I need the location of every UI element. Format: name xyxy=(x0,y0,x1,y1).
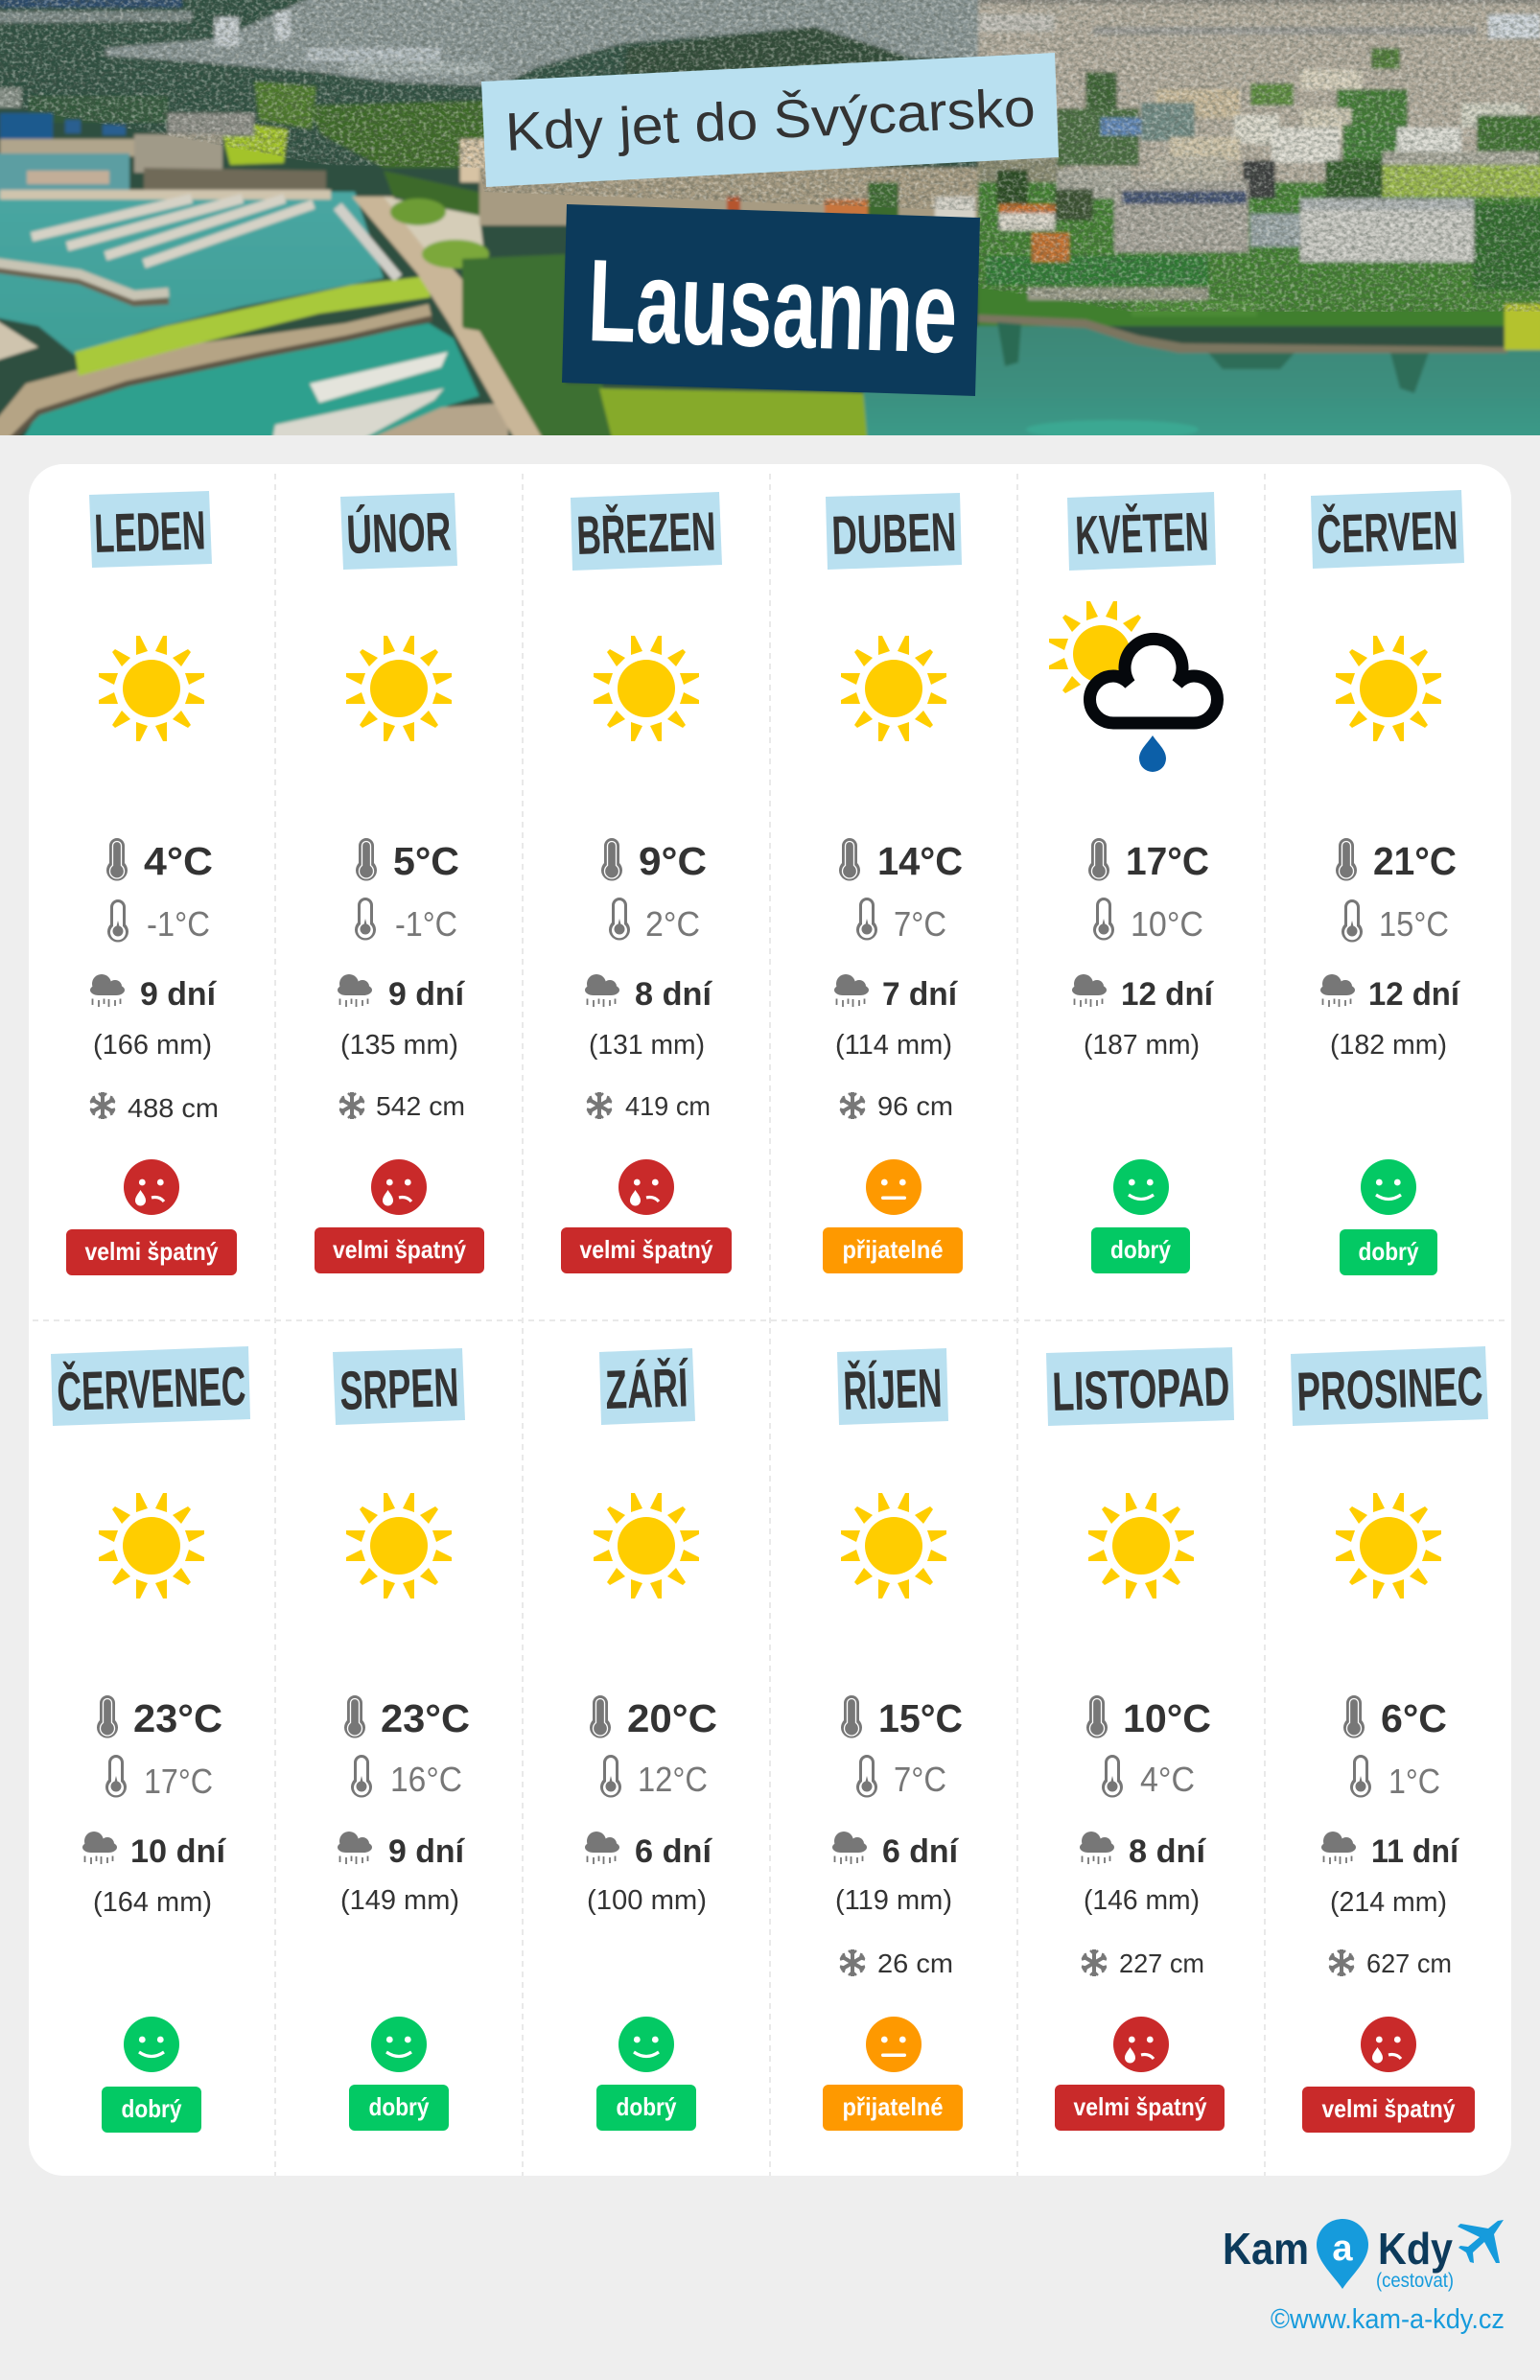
rain days xyxy=(1321,1832,1459,1870)
precipitation: (214 mm) xyxy=(1330,1887,1447,1918)
rain days: 9 dní xyxy=(140,976,218,1013)
rain days: 8 dní xyxy=(1129,1833,1207,1870)
photo: aerial view of Lausanne waterfront xyxy=(0,0,1540,451)
pin letter: a xyxy=(1332,2228,1353,2269)
rating badge: dobrý xyxy=(121,2094,182,2123)
high temperature: 20°C xyxy=(627,1696,717,1740)
rating badge: velmi špatný xyxy=(1321,2094,1456,2123)
snow: 96 cm xyxy=(877,1091,953,1121)
low temperature: -1°C xyxy=(147,904,210,944)
low temperature xyxy=(107,899,210,944)
icon: sun xyxy=(1336,636,1441,741)
rain days xyxy=(1320,974,1461,1013)
precipitation: (114 mm) xyxy=(835,1030,952,1061)
high temperature xyxy=(1086,1695,1211,1740)
heading xyxy=(333,1348,465,1425)
snow: 26 cm xyxy=(877,1948,953,1978)
icon: sun xyxy=(1336,1493,1441,1598)
low temperature: 1°C xyxy=(1388,1762,1440,1801)
decorative base layers follow xyxy=(0,0,1540,451)
precipitation: (100 mm) xyxy=(587,1885,707,1916)
heading: ZÁŘÍ xyxy=(604,1356,690,1421)
website credit: ©www.kam-a-kdy.cz xyxy=(1271,2304,1505,2335)
rating smiley xyxy=(371,1159,427,1215)
icon: sun with cloud and rain drop xyxy=(1049,601,1218,772)
rating smiley xyxy=(866,1159,922,1215)
rain days: 12 dní xyxy=(1368,976,1461,1013)
month: LISTOPAD xyxy=(1046,1347,1234,2131)
month: DUBEN xyxy=(823,493,963,1273)
low temperature xyxy=(1350,1755,1440,1801)
high temperature: 17°C xyxy=(1126,839,1209,883)
rating badge xyxy=(1302,2087,1475,2133)
heading: KVĚTEN xyxy=(1074,501,1209,567)
precipitation: (135 mm) xyxy=(340,1030,458,1061)
title banner xyxy=(562,204,980,396)
rain days: 9 dní xyxy=(388,976,466,1013)
high temperature xyxy=(601,838,707,883)
rain days xyxy=(1072,974,1215,1013)
icon: sun xyxy=(99,636,204,741)
rating badge: velmi špatný xyxy=(84,1237,219,1266)
low temperature: 16°C xyxy=(390,1760,462,1799)
precipitation: (131 mm) xyxy=(589,1030,705,1061)
rain days xyxy=(585,974,713,1013)
low temperature xyxy=(355,898,457,944)
rain days: 6 dní xyxy=(882,1833,960,1870)
high temperature xyxy=(841,1695,963,1740)
icon: sun xyxy=(1088,1493,1194,1598)
rating smiley xyxy=(124,1159,179,1215)
rating badge xyxy=(823,2085,963,2131)
precipitation: (146 mm) xyxy=(1084,1885,1200,1916)
rain days: 9 dní xyxy=(388,1833,466,1870)
heading xyxy=(1291,1346,1488,1426)
rating badge: přijatelné xyxy=(842,1235,944,1264)
rain days: 10 dní xyxy=(130,1833,227,1870)
low temperature: 12°C xyxy=(638,1760,708,1799)
rating smiley xyxy=(1361,1159,1416,1215)
rating smiley xyxy=(124,2017,179,2072)
rating badge xyxy=(102,2087,201,2133)
low temperature xyxy=(856,898,946,944)
high temperature xyxy=(97,1695,222,1740)
high temperature: 14°C xyxy=(877,839,963,883)
low temperature xyxy=(600,1755,708,1799)
rain days: 8 dní xyxy=(635,976,713,1013)
low temperature: -1°C xyxy=(395,904,457,944)
heading xyxy=(571,492,722,571)
wordmark Kam: Kam xyxy=(1223,2224,1309,2274)
heading xyxy=(89,491,212,568)
icon: airplane xyxy=(1458,2220,1504,2263)
rating badge xyxy=(315,1227,484,1273)
high temperature: 6°C xyxy=(1381,1696,1447,1740)
low temperature: 17°C xyxy=(144,1762,213,1801)
rain days: 11 dní xyxy=(1371,1833,1459,1870)
rain days xyxy=(338,974,466,1013)
rain days xyxy=(834,974,959,1013)
rating smiley xyxy=(866,2017,922,2072)
heading xyxy=(1046,1347,1234,1426)
snow: 419 cm xyxy=(625,1091,711,1121)
icon: sun xyxy=(346,1493,452,1598)
heading: LEDEN xyxy=(93,500,206,565)
snow xyxy=(90,1092,219,1123)
rating badge xyxy=(1055,2085,1225,2131)
rating badge xyxy=(823,1227,963,1273)
heading xyxy=(837,1348,948,1425)
wordmark Kdy: Kdy xyxy=(1378,2224,1453,2274)
month: ŘÍJEN xyxy=(823,1348,963,2131)
precipitation: (164 mm) xyxy=(93,1887,212,1918)
snow xyxy=(1082,1948,1204,1978)
rating badge: dobrý xyxy=(616,2092,677,2121)
precipitation: (187 mm) xyxy=(1084,1030,1200,1061)
low temperature xyxy=(351,1755,462,1799)
heading: ČERVEN xyxy=(1316,499,1458,566)
rating badge xyxy=(1340,1229,1437,1275)
icon: sun xyxy=(346,636,452,741)
rating badge: dobrý xyxy=(1110,1235,1171,1264)
high temperature: 23°C xyxy=(133,1696,222,1740)
month: PROSINEC xyxy=(1291,1346,1488,2133)
high temperature: 9°C xyxy=(639,839,707,883)
rain days: 12 dní xyxy=(1121,976,1215,1013)
panel: monthly climate card xyxy=(29,464,1511,2176)
rating badge: velmi špatný xyxy=(1074,2092,1207,2121)
heading xyxy=(826,493,962,570)
heading xyxy=(1067,492,1216,571)
precipitation: (119 mm) xyxy=(835,1885,952,1916)
heading xyxy=(340,493,457,570)
precipitation: (182 mm) xyxy=(1330,1030,1447,1061)
low temperature: 10°C xyxy=(1131,904,1203,944)
rating smiley xyxy=(618,2017,674,2072)
low temperature xyxy=(1342,899,1449,944)
high temperature: 4°C xyxy=(144,839,213,883)
icon: map pin xyxy=(1317,2219,1368,2289)
rain days xyxy=(1080,1832,1207,1870)
low temperature: 7°C xyxy=(894,1760,946,1799)
rating smiley xyxy=(618,1159,674,1215)
snow xyxy=(587,1091,711,1121)
month: ČERVENEC xyxy=(51,1346,250,2133)
snow: 488 cm xyxy=(128,1093,219,1123)
title banner: Lausanne xyxy=(586,235,959,378)
high temperature xyxy=(1336,838,1457,883)
month: KVĚTEN xyxy=(1049,492,1218,1273)
high temperature: 15°C xyxy=(878,1696,963,1740)
heading: LISTOPAD xyxy=(1051,1356,1230,1423)
rating badge xyxy=(596,2085,696,2131)
rain days xyxy=(832,1832,960,1870)
icon: sun xyxy=(99,1493,204,1598)
snow xyxy=(1329,1948,1452,1978)
logo: Kam a Kdy xyxy=(1223,2219,1504,2292)
low temperature xyxy=(105,1755,213,1801)
rating smiley xyxy=(1113,2017,1169,2072)
high temperature xyxy=(106,838,213,883)
rain days xyxy=(585,1832,713,1870)
heading xyxy=(1311,490,1464,569)
heading: BŘEZEN xyxy=(575,500,716,567)
high temperature xyxy=(1343,1695,1447,1740)
snow xyxy=(840,1948,953,1978)
high temperature xyxy=(344,1695,470,1740)
snow xyxy=(840,1091,953,1121)
rating smiley xyxy=(1361,2017,1416,2072)
high temperature: 23°C xyxy=(381,1696,470,1740)
rating badge: velmi špatný xyxy=(333,1235,466,1264)
month: LEDEN xyxy=(66,491,237,1275)
precipitation: (166 mm) xyxy=(93,1030,212,1061)
icon: sun xyxy=(841,636,946,741)
rating badge: dobrý xyxy=(1358,1237,1419,1266)
subtitle banner xyxy=(481,53,1059,187)
rating badge xyxy=(349,2085,449,2131)
rating smiley xyxy=(371,2017,427,2072)
heading xyxy=(51,1346,250,1426)
tagline: (cestovat) xyxy=(1376,2270,1454,2292)
snow: 227 cm xyxy=(1119,1948,1204,1978)
low temperature: 15°C xyxy=(1379,904,1449,944)
heading: ČERVENEC xyxy=(56,1355,246,1423)
high temperature: 21°C xyxy=(1373,839,1457,883)
heading: ŘÍJEN xyxy=(842,1357,943,1422)
icon: sun xyxy=(594,1493,699,1598)
heading: ÚNOR xyxy=(345,502,452,566)
icon: sun xyxy=(841,1493,946,1598)
month: BŘEZEN xyxy=(561,492,732,1273)
high temperature: 10°C xyxy=(1123,1696,1211,1740)
rating badge xyxy=(1091,1227,1190,1273)
low temperature: 4°C xyxy=(1140,1760,1195,1799)
snow: 542 cm xyxy=(376,1091,465,1121)
icon: sun xyxy=(594,636,699,741)
high temperature xyxy=(356,838,459,883)
rating smiley xyxy=(1113,1159,1169,1215)
heading: DUBEN xyxy=(830,502,957,567)
heading: SRPEN xyxy=(338,1357,459,1422)
rating badge xyxy=(66,1229,237,1275)
snow: 627 cm xyxy=(1366,1948,1452,1978)
precipitation: (149 mm) xyxy=(340,1885,459,1916)
month: SRPEN xyxy=(333,1348,470,2131)
high temperature xyxy=(590,1695,717,1740)
month: ČERVEN xyxy=(1311,490,1464,1275)
rating badge: dobrý xyxy=(368,2092,430,2121)
rating badge: velmi špatný xyxy=(579,1235,713,1264)
subtitle banner: Kdy jet do Švýcarsko xyxy=(504,77,1037,162)
rating badge xyxy=(561,1227,732,1273)
rating badge: přijatelné xyxy=(842,2092,944,2121)
heading xyxy=(599,1348,695,1425)
rain days xyxy=(82,1832,227,1870)
high temperature xyxy=(1088,838,1209,883)
high temperature xyxy=(839,838,963,883)
rain days xyxy=(338,1832,466,1870)
low temperature xyxy=(1093,898,1203,944)
low temperature xyxy=(856,1755,946,1799)
rain days: 6 dní xyxy=(635,1833,713,1870)
rain days xyxy=(90,974,218,1013)
low temperature xyxy=(609,898,700,944)
high temperature: 5°C xyxy=(393,839,459,883)
low temperature xyxy=(1102,1755,1195,1799)
month: ÚNOR xyxy=(315,493,484,1273)
rain days: 7 dní xyxy=(882,976,959,1013)
month: ZÁŘÍ xyxy=(585,1348,717,2131)
low temperature: 7°C xyxy=(894,904,946,944)
low temperature: 2°C xyxy=(645,904,700,944)
